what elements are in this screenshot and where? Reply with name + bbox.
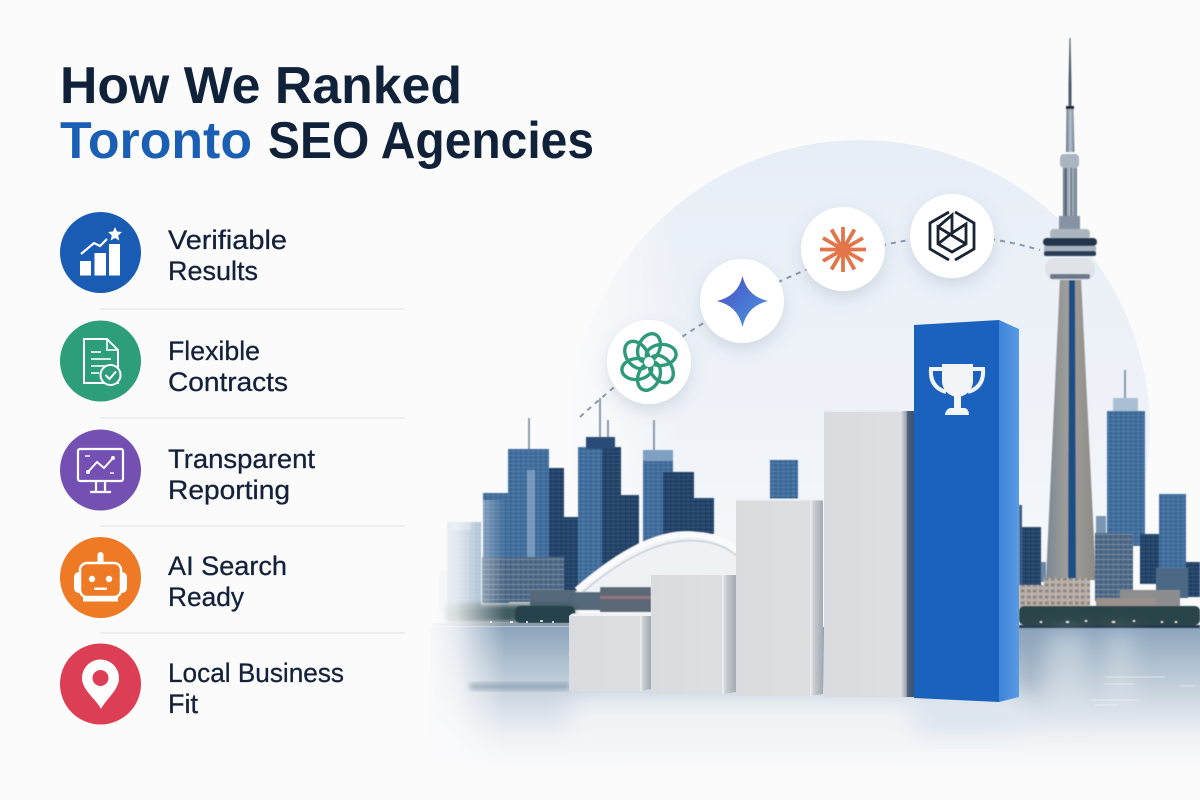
label: transparent reporting (168, 444, 315, 505)
logo badge: openai (607, 320, 691, 404)
logo badge: claude burst (801, 207, 885, 291)
label: local business fit (168, 658, 344, 719)
criterion: ai search ready (60, 537, 287, 618)
criterion: flexible contracts (60, 320, 288, 402)
icon: robot face (60, 537, 141, 618)
shoreline trees left (432, 604, 575, 626)
title: SEO Agencies (268, 112, 594, 170)
water reflections (1020, 632, 1195, 717)
bar 2 (651, 573, 736, 694)
criterion: local business fit (60, 644, 344, 724)
label: local business fit: Fit (168, 689, 198, 719)
floor reflection (470, 684, 1019, 736)
label: transparent reporting: Transparent (168, 444, 315, 474)
logo badge: perplexity hexagon (910, 194, 994, 278)
label: flexible contracts (168, 336, 288, 397)
icon: trophy (931, 364, 983, 415)
label: local business fit: Local Business (168, 658, 344, 688)
icon: map pin (60, 644, 141, 724)
label: verifiable results: Results (168, 256, 258, 286)
label: ai search ready: Ready (168, 582, 244, 612)
label: flexible contracts: Flexible (168, 336, 260, 366)
panel: skyline illustration (425, 38, 1200, 780)
label: verifiable results: Verifiable (168, 225, 287, 255)
label: flexible contracts: Contracts (168, 367, 288, 397)
criterion: verifiable results (60, 212, 287, 293)
backdrop halo circle (560, 140, 1150, 720)
label: verifiable results (168, 225, 287, 286)
label: transparent reporting: Reporting (168, 475, 290, 505)
label: ai search ready (168, 551, 287, 612)
bar 3 (736, 498, 823, 696)
panel: ranking criteria list (60, 212, 405, 724)
city skyline right (1019, 370, 1200, 628)
title: How We Ranked (60, 57, 462, 115)
water (430, 627, 1200, 767)
logo badge: gemini star (700, 259, 784, 343)
bar chart: rising ranking bars (569, 320, 1019, 702)
icon: rising bars with star (60, 212, 141, 293)
bar 1 (569, 614, 651, 691)
icon: contract document with check (60, 320, 141, 402)
title: Toronto (60, 112, 252, 170)
bar 4 (824, 410, 914, 697)
cn tower (1043, 38, 1097, 580)
label: ai search ready: AI Search (168, 551, 287, 581)
criterion: transparent reporting (60, 430, 315, 510)
dashed orbit line (580, 236, 1040, 417)
icon: monitor with line chart (60, 430, 141, 510)
left edge fade (425, 500, 505, 780)
city skyline left (439, 398, 798, 612)
bar 5: winner (914, 320, 1019, 702)
title (60, 57, 594, 170)
